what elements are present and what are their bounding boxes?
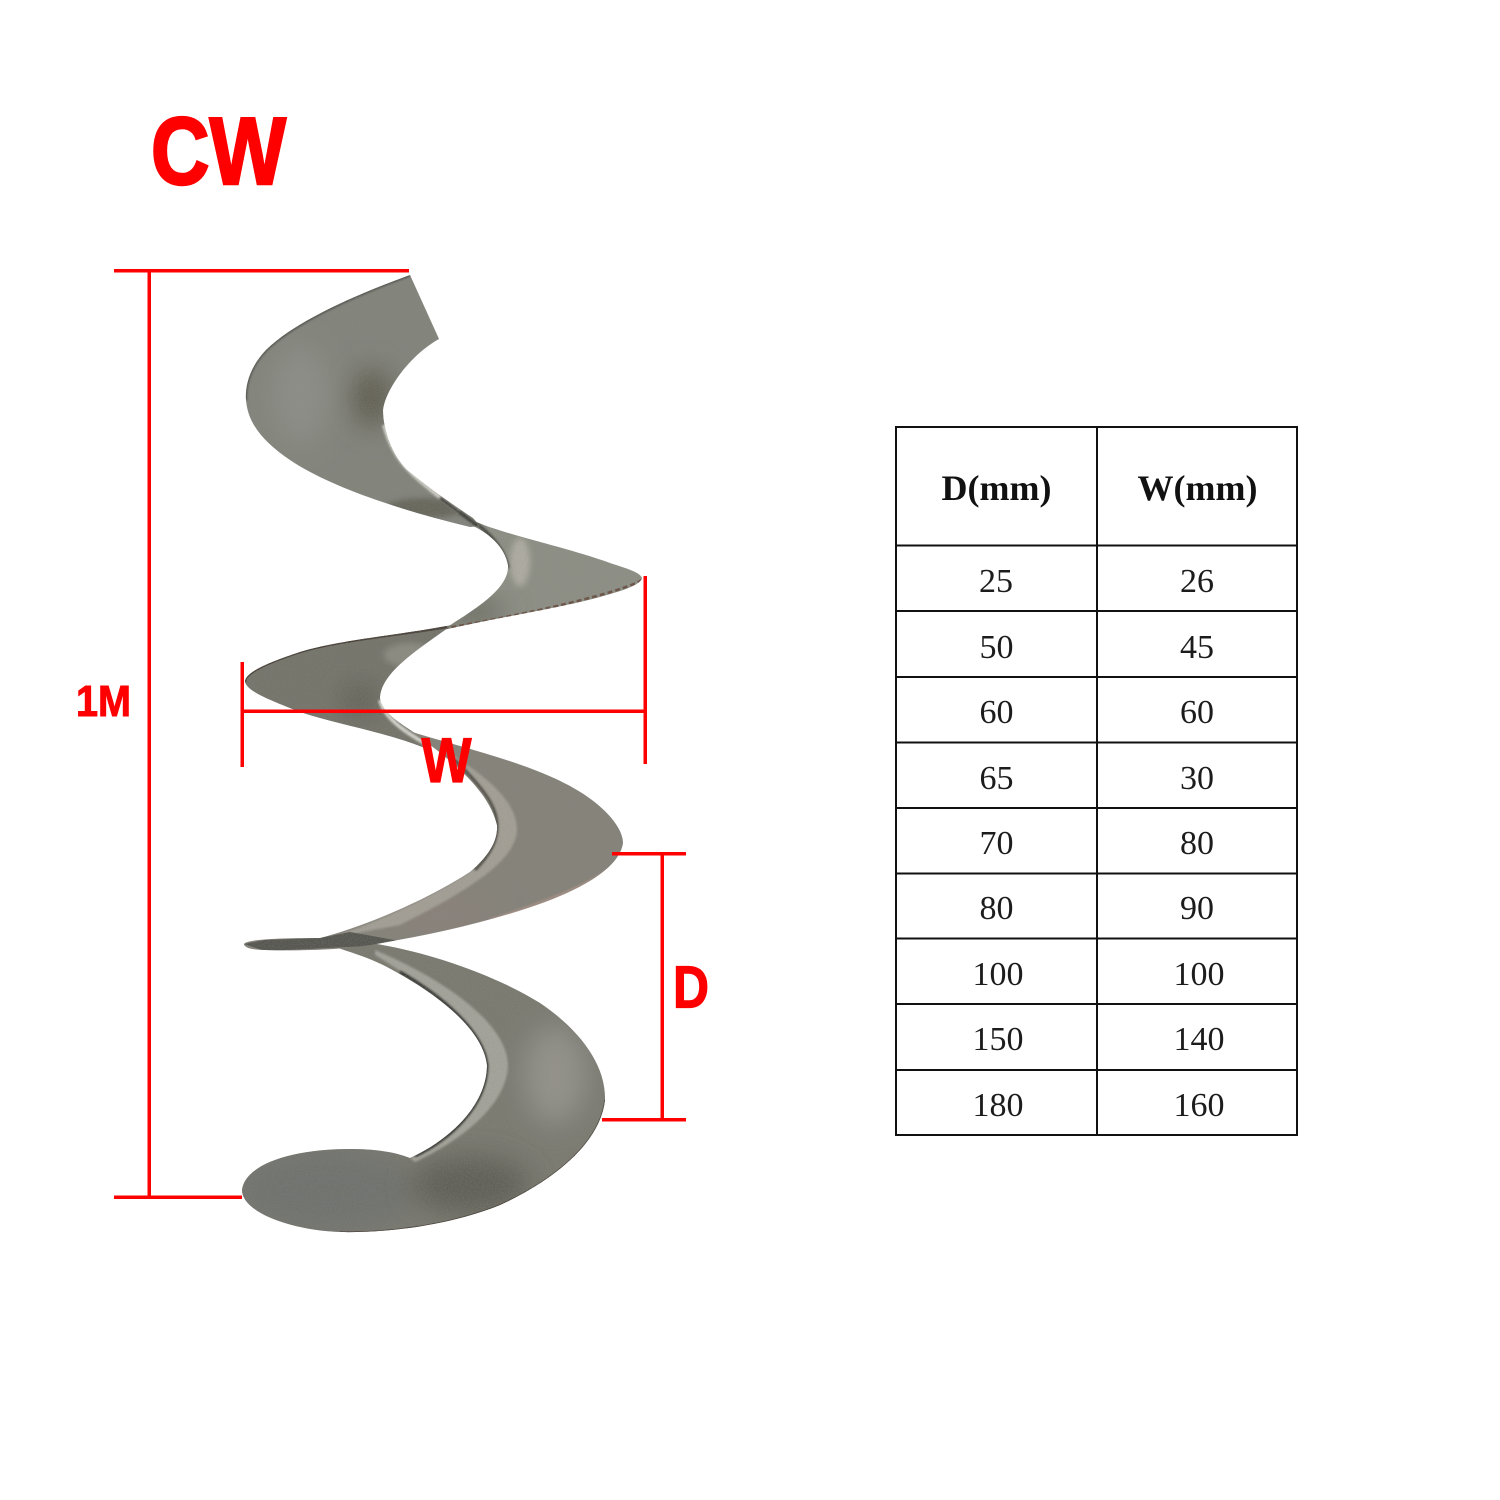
table rows: 70 <box>980 825 1014 862</box>
blade turn 5 (bottom disc) <box>235 943 605 1232</box>
table rows: 100 <box>1174 956 1224 993</box>
blade turn 2 (right tip) <box>443 517 642 630</box>
blade turn 4 <box>244 732 623 951</box>
table rows: 25 <box>979 563 1013 600</box>
spiral blade photo <box>235 275 642 1232</box>
table rows: 26 <box>1180 563 1214 600</box>
label: 1M: 1M <box>76 677 131 726</box>
table rows: 140 <box>1174 1021 1224 1058</box>
table rows: 65 <box>980 760 1014 797</box>
table rows: 80 <box>980 890 1014 927</box>
table header: W(mm) <box>1138 468 1257 508</box>
label: W: W <box>422 726 472 796</box>
dimension: W width <box>240 576 647 796</box>
table header: D(mm) <box>942 468 1051 508</box>
table rows <box>972 563 1224 1124</box>
label: D: D <box>673 954 709 1020</box>
blade turn 1 (top) <box>246 275 480 527</box>
table rows: 180 <box>972 1087 1024 1124</box>
table rows: 60 <box>980 694 1014 731</box>
dimension: D pitch <box>602 852 709 1122</box>
table header <box>942 468 1257 508</box>
table rows: 60 <box>1180 694 1214 731</box>
table rows: 45 <box>1180 629 1214 666</box>
table rows: 100 <box>972 956 1024 993</box>
table rows: 160 <box>1174 1087 1224 1124</box>
title: CW: CW <box>151 98 286 205</box>
blade turn 3 (left tip) <box>245 625 452 748</box>
table rows: 150 <box>972 1021 1024 1058</box>
table rows: 50 <box>980 629 1014 666</box>
table: D and W sizes <box>896 427 1297 1135</box>
dimension: 1M total length <box>76 269 409 1199</box>
table rows: 90 <box>1180 890 1214 927</box>
table rows: 80 <box>1180 825 1214 862</box>
table rows: 30 <box>1180 760 1214 797</box>
